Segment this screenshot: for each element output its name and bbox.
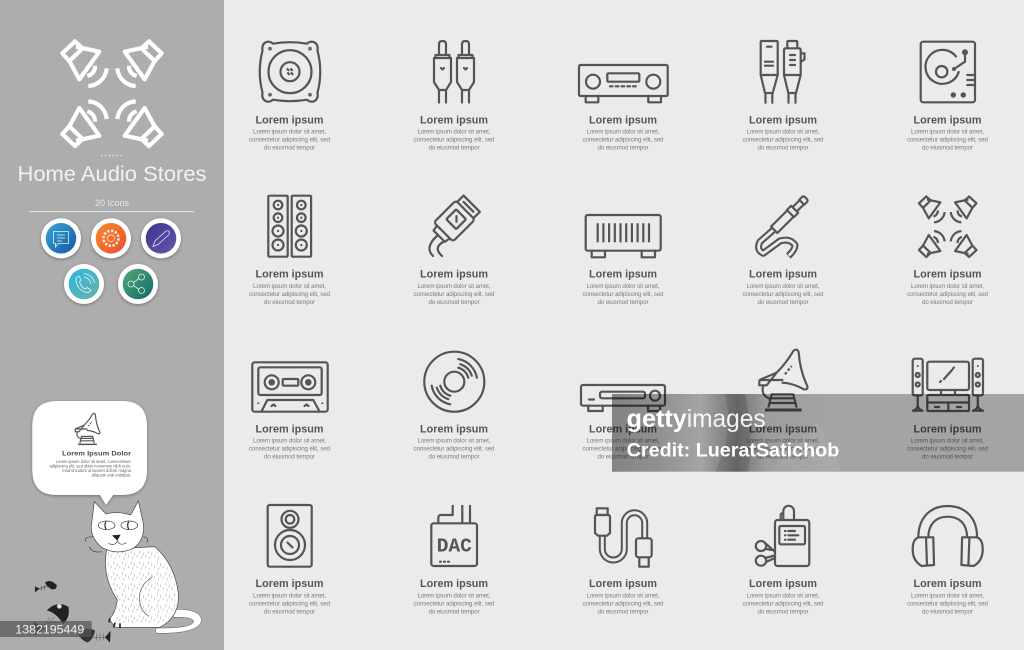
- description: do eiusmod tempor: [922, 299, 973, 306]
- icon: music player: [756, 506, 809, 566]
- badge: gear: [91, 218, 131, 258]
- description: [414, 438, 495, 461]
- item: AV receiver: [579, 65, 668, 152]
- icon: DAC box: [431, 505, 477, 566]
- badge: pen: [141, 218, 181, 258]
- item: headphones: [907, 506, 989, 616]
- label: Lorem ipsum: [749, 578, 817, 590]
- description: [414, 283, 495, 306]
- description: do eiusmod tempor: [264, 299, 315, 306]
- bubble text: mod tincidunt ut laoreet dolore magna: [62, 468, 132, 473]
- description: consectetur adipiscing elit, sed: [249, 446, 331, 453]
- description: consectetur adipiscing elit, sed: [582, 446, 664, 453]
- item: audio jack: [742, 194, 824, 306]
- description: consectetur adipiscing elit, sed: [742, 446, 824, 453]
- icon: RCA plugs: [434, 41, 474, 102]
- label: Lorem ipsum: [256, 423, 324, 435]
- watermark logo: images: [687, 405, 766, 433]
- cat tail: [155, 609, 202, 633]
- bubble heading: Lorem Ipsum Dolor: [62, 450, 131, 458]
- description: Lorem ipsum dolor sit amet,: [253, 438, 326, 445]
- divider line: [29, 211, 194, 212]
- icon: bookshelf speaker: [268, 505, 312, 567]
- description: Lorem ipsum dolor sit amet,: [418, 593, 491, 600]
- description: do eiusmod tempor: [598, 299, 648, 306]
- icon: four speakers large: [62, 41, 162, 146]
- fish bones: [45, 581, 57, 589]
- bubble text: Lorem ipsum dolor sit amet, consectetuer: [56, 459, 132, 464]
- description: Lorem ipsum dolor sit amet,: [746, 283, 820, 290]
- label: Lorem ipsum: [914, 423, 982, 435]
- description: Lorem ipsum dolor sit amet,: [418, 283, 491, 290]
- DAC text: DAC: [437, 536, 472, 558]
- label: Lorem ipsum: [914, 269, 982, 281]
- label: Lorem ipsum: [589, 114, 657, 126]
- label: Lorem ipsum: [256, 269, 324, 281]
- image id tag: [0, 621, 92, 637]
- description: Lorem ipsum dolor sit amet,: [911, 283, 984, 290]
- label: Lorem ipsum: [420, 423, 488, 435]
- description: [907, 593, 989, 616]
- description: do eiusmod tempor: [428, 454, 480, 461]
- label: Lorem ipsum: [749, 423, 817, 435]
- label: Lorem ipsum: [914, 114, 982, 126]
- description: [414, 593, 495, 616]
- bubble text: [50, 459, 132, 478]
- cat head: [91, 501, 144, 552]
- description: do eiusmod tempor: [428, 145, 480, 152]
- description: [742, 283, 824, 306]
- item: USB cable: [582, 508, 664, 616]
- icon: gramophone: [759, 350, 807, 410]
- description: [414, 129, 495, 152]
- title: Home Audio Stores: [18, 162, 206, 186]
- icon: headphones: [913, 506, 983, 566]
- icon: XLR plugs: [761, 41, 804, 103]
- description: [742, 129, 824, 152]
- description: consectetur adipiscing elit, sed: [582, 291, 664, 298]
- description: do eiusmod tempor: [264, 609, 315, 616]
- cat body: [105, 547, 178, 627]
- description: consectetur adipiscing elit, sed: [414, 446, 495, 453]
- description: Lorem ipsum dolor sit amet,: [418, 438, 491, 445]
- description: consectetur adipiscing elit, sed: [249, 137, 331, 144]
- icon: four speakers: [919, 196, 976, 257]
- description: consectetur adipiscing elit, sed: [907, 446, 989, 453]
- item: tower speakers: [249, 196, 331, 306]
- icon: HDMI plug: [429, 194, 481, 256]
- label: Lorem ipsum: [749, 269, 817, 281]
- label: Lorem ipsum: [256, 578, 324, 590]
- description: do eiusmod tempor: [758, 299, 808, 306]
- item: portable music player: [742, 506, 824, 616]
- description: Lorem ipsum dolor sit amet,: [746, 129, 820, 136]
- item: home theater: [907, 359, 989, 461]
- label: Lorem ipsum: [589, 578, 657, 590]
- description: Lorem ipsum dolor sit amet,: [911, 129, 984, 136]
- description: Lorem ipsum dolor sit amet,: [746, 438, 820, 445]
- description: consectetur adipiscing elit, sed: [582, 137, 664, 144]
- item: DAC: [414, 505, 495, 616]
- description: do eiusmod tempor: [264, 145, 315, 152]
- label: Lorem ipsum: [256, 114, 324, 126]
- description: do eiusmod tempor: [598, 145, 648, 152]
- description: [582, 129, 664, 152]
- icon: USB cable: [595, 508, 652, 567]
- illustration: cat and fish bones: [33, 501, 202, 643]
- item: XLR connectors: [742, 41, 824, 152]
- icon: tower speakers: [268, 196, 311, 257]
- description: Lorem ipsum dolor sit amet,: [586, 438, 660, 445]
- description: [742, 438, 824, 461]
- description: [907, 438, 989, 461]
- description: do eiusmod tempor: [922, 454, 973, 461]
- description: do eiusmod tempor: [922, 609, 973, 616]
- icon: home theater: [913, 359, 983, 411]
- description: consectetur adipiscing elit, sed: [249, 601, 331, 608]
- description: consectetur adipiscing elit, sed: [582, 601, 664, 608]
- badge: chat: [41, 218, 81, 258]
- description: Lorem ipsum dolor sit amet,: [253, 129, 326, 136]
- description: consectetur adipiscing elit, sed: [249, 291, 331, 298]
- icon: subwoofer: [260, 42, 320, 102]
- icon count: 20 Icons: [95, 198, 130, 208]
- item: RCA cables: [414, 41, 495, 152]
- item: DVD player: [581, 385, 665, 461]
- icon: amplifier: [586, 215, 661, 257]
- item: compact disc: [414, 352, 495, 461]
- label: Lorem ipsum: [914, 578, 982, 590]
- description: consectetur adipiscing elit, sed: [742, 137, 824, 144]
- label: Lorem ipsum: [589, 269, 657, 281]
- item: gramophone: [742, 350, 824, 461]
- icon: cassette: [252, 362, 328, 412]
- description: Lorem ipsum dolor sit amet,: [253, 283, 326, 290]
- watermark credit: Credit: LueratSatichob: [627, 441, 839, 462]
- description: Lorem ipsum dolor sit amet,: [586, 283, 660, 290]
- description: [742, 593, 824, 616]
- description: Lorem ipsum dolor sit amet,: [253, 593, 326, 600]
- description: [249, 283, 331, 306]
- image id tag: 1382195449: [15, 622, 84, 636]
- description: [582, 438, 664, 461]
- icon: gramophone small: [75, 413, 100, 444]
- description: Lorem ipsum dolor sit amet,: [586, 129, 660, 136]
- description: consectetur adipiscing elit, sed: [414, 601, 495, 608]
- description: do eiusmod tempor: [758, 145, 808, 152]
- description: consectetur adipiscing elit, sed: [414, 291, 495, 298]
- description: consectetur adipiscing elit, sed: [742, 601, 824, 608]
- icon: receiver: [579, 65, 668, 102]
- item: cassette: [249, 362, 331, 461]
- label: Lorem ipsum: [420, 578, 488, 590]
- speech bubble: [32, 401, 147, 505]
- label: Lorem ipsum: [589, 423, 657, 435]
- item: HDMI cable: [414, 194, 495, 306]
- description: Lorem ipsum dolor sit amet,: [911, 593, 984, 600]
- description: Lorem ipsum dolor sit amet,: [746, 593, 820, 600]
- badge: share: [118, 264, 158, 304]
- description: do eiusmod tempor: [598, 454, 648, 461]
- description: consectetur adipiscing elit, sed: [907, 601, 989, 608]
- icon: turntable: [921, 42, 975, 102]
- description: Lorem ipsum dolor sit amet,: [911, 438, 984, 445]
- item: amplifier: [582, 215, 664, 306]
- description: [249, 438, 331, 461]
- description: do eiusmod tempor: [758, 454, 808, 461]
- bubble text: adipiscing elit, sed diam nonummy nibh euis-: [50, 464, 132, 468]
- description: [907, 283, 989, 306]
- description: [249, 129, 331, 152]
- icon: disc: [424, 352, 484, 412]
- description: [907, 129, 989, 152]
- watermark logo: [627, 405, 766, 433]
- label: Lorem ipsum: [749, 114, 817, 126]
- panel: left sidebar: [0, 0, 224, 650]
- description: do eiusmod tempor: [264, 454, 315, 461]
- badge: phone: [64, 264, 104, 304]
- item: turntable: [907, 42, 989, 152]
- label: Lorem ipsum: [420, 269, 488, 281]
- icon: audio jack: [759, 194, 810, 256]
- decorative dots: [101, 154, 124, 156]
- item: bookshelf speaker: [249, 505, 331, 616]
- watermark logo: getty: [627, 405, 687, 433]
- description: consectetur adipiscing elit, sed: [742, 291, 824, 298]
- description: consectetur adipiscing elit, sed: [907, 291, 989, 298]
- icon: DVD player: [581, 385, 665, 411]
- item: four speakers: [907, 196, 989, 306]
- description: [582, 593, 664, 616]
- cat claws: [109, 618, 120, 628]
- description: consectetur adipiscing elit, sed: [907, 137, 989, 144]
- watermark banner: [612, 394, 1024, 472]
- description: [582, 283, 664, 306]
- item: subwoofer speaker: [249, 42, 331, 152]
- description: do eiusmod tempor: [758, 609, 808, 616]
- description: consectetur adipiscing elit, sed: [414, 137, 495, 144]
- label: Lorem ipsum: [420, 114, 488, 126]
- description: do eiusmod tempor: [428, 609, 480, 616]
- description: do eiusmod tempor: [598, 609, 648, 616]
- description: Lorem ipsum dolor sit amet,: [586, 593, 660, 600]
- bubble text: aliquam erat volutpat.: [92, 472, 131, 478]
- description: Lorem ipsum dolor sit amet,: [418, 129, 491, 136]
- description: do eiusmod tempor: [428, 299, 480, 306]
- description: [249, 593, 331, 616]
- description: do eiusmod tempor: [922, 145, 973, 152]
